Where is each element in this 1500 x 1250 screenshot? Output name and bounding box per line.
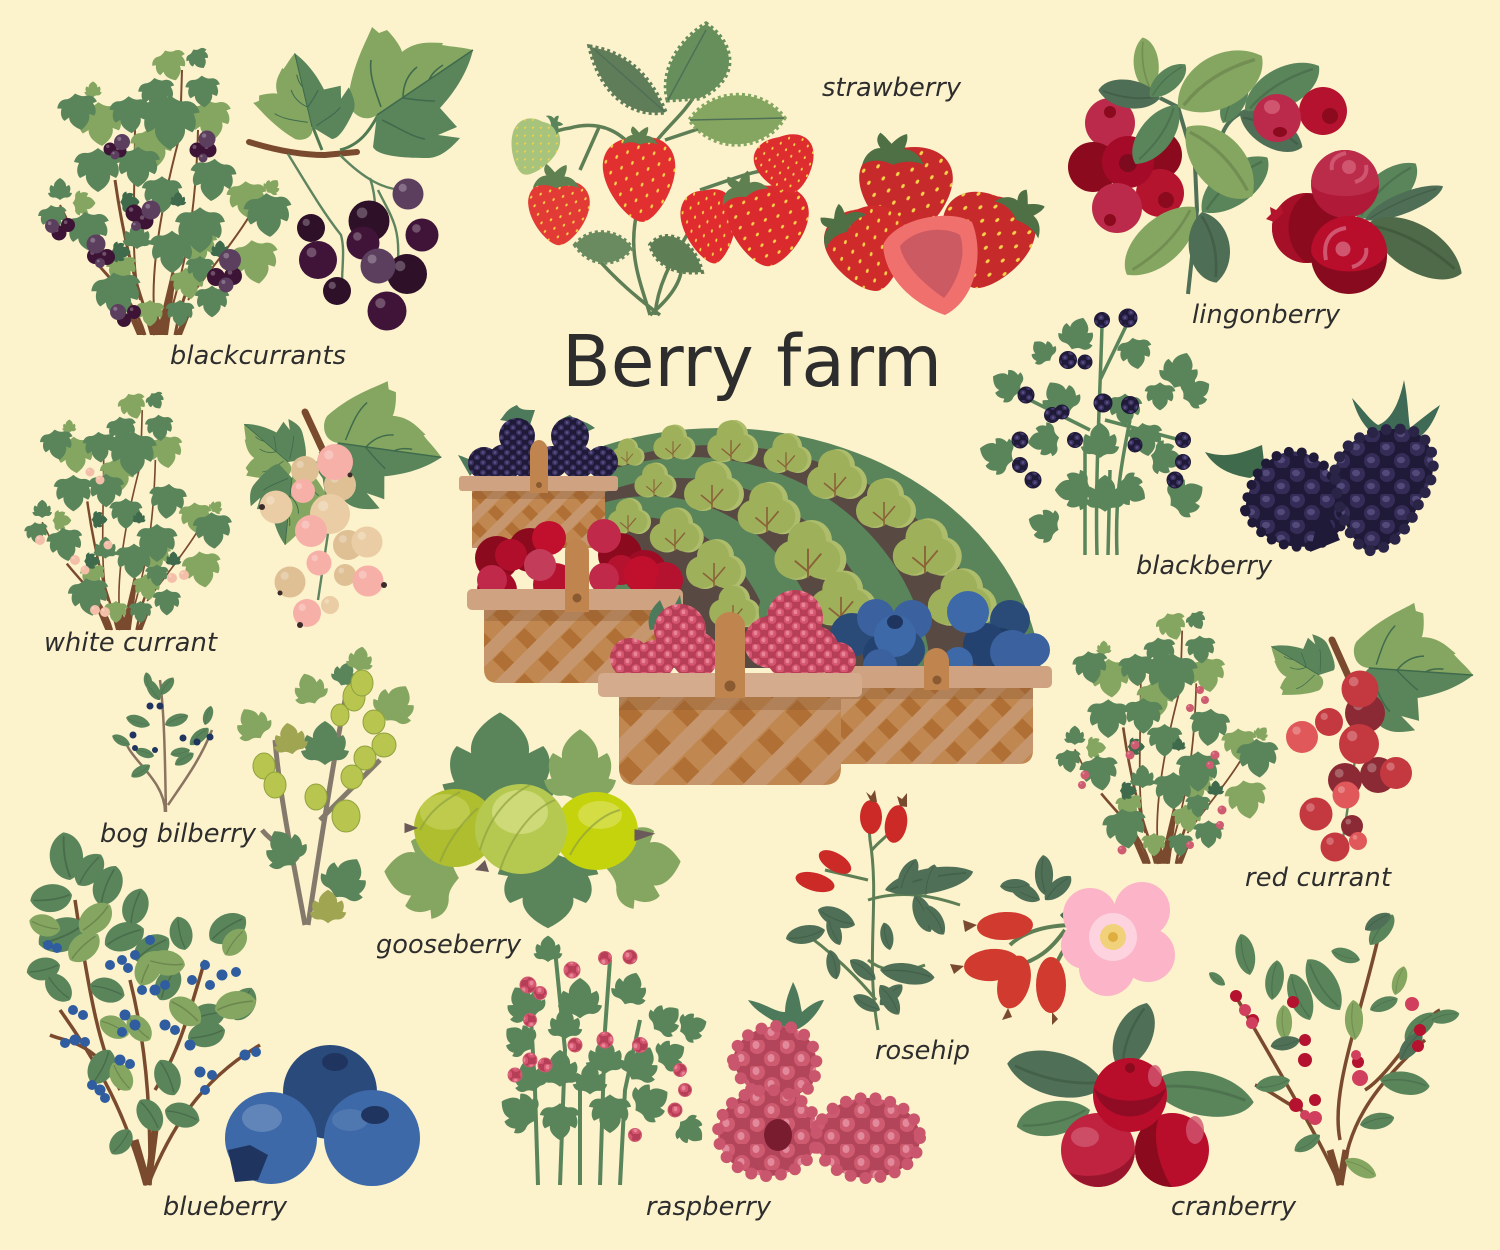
panel: bog bilberry [100, 672, 257, 849]
large raspberries [718, 982, 920, 1178]
bog bilberry shrub [110, 672, 216, 812]
white currant branch [233, 367, 455, 628]
label: blackberry: blackberry [1136, 551, 1273, 581]
cranberry bush [1206, 908, 1461, 1185]
label: blackcurrants: blackcurrants [170, 341, 346, 371]
panel: blackberry [973, 309, 1440, 581]
large blueberries [225, 1045, 420, 1186]
label: cranberry: cranberry [1171, 1192, 1297, 1222]
strawberry plant [501, 24, 823, 315]
label: red currant: red currant [1245, 863, 1392, 893]
label: gooseberry: gooseberry [376, 930, 522, 960]
label: blueberry: blueberry [163, 1192, 288, 1222]
label: lingonberry: lingonberry [1192, 300, 1341, 330]
gooseberry fruit with leaves [381, 712, 684, 928]
blackcurrant branch with berries [247, 27, 473, 330]
blackcurrant bush [37, 44, 294, 335]
panel: blueberry [25, 831, 420, 1222]
large blackberries [1205, 380, 1440, 552]
basket: blackberries [458, 405, 618, 548]
label: rosehip: rosehip [875, 1036, 970, 1066]
label: bog bilberry: bog bilberry [100, 819, 257, 849]
gooseberry bush [228, 644, 425, 925]
panel: white currant [23, 367, 455, 658]
panel: cranberry [1002, 908, 1461, 1222]
field rows [604, 420, 1041, 668]
panel: blackcurrants [37, 27, 473, 371]
white currant bush [23, 388, 234, 630]
label: white currant: white currant [44, 628, 218, 658]
panel: strawberry [501, 24, 1057, 315]
basket: lingonberries [467, 519, 683, 683]
blackberry bush [973, 309, 1217, 555]
red currant bush [1054, 608, 1281, 864]
panel: raspberry [491, 936, 920, 1222]
blueberry bush [25, 831, 262, 1185]
rosehip branch [784, 790, 976, 1030]
basket: raspberries [598, 578, 862, 785]
raspberry bush [491, 936, 712, 1185]
panel: central farm with baskets [458, 405, 1052, 785]
title: Berry farm [562, 320, 942, 403]
large lingonberries [1266, 150, 1472, 295]
large cranberries with leaves [1002, 996, 1258, 1187]
panel: gooseberry [228, 644, 684, 960]
panel: red currant [1054, 590, 1486, 893]
panel: lingonberry [1068, 35, 1472, 330]
red currant branch [1261, 590, 1486, 862]
label: strawberry: strawberry [822, 73, 962, 103]
label: raspberry: raspberry [646, 1192, 772, 1222]
rosehip fruit and flower [950, 855, 1175, 1025]
panel: rosehip [784, 790, 1175, 1066]
lingonberry sprig [1068, 35, 1347, 294]
basket: blueberries [797, 591, 1052, 764]
strawberry pile [809, 133, 1057, 315]
